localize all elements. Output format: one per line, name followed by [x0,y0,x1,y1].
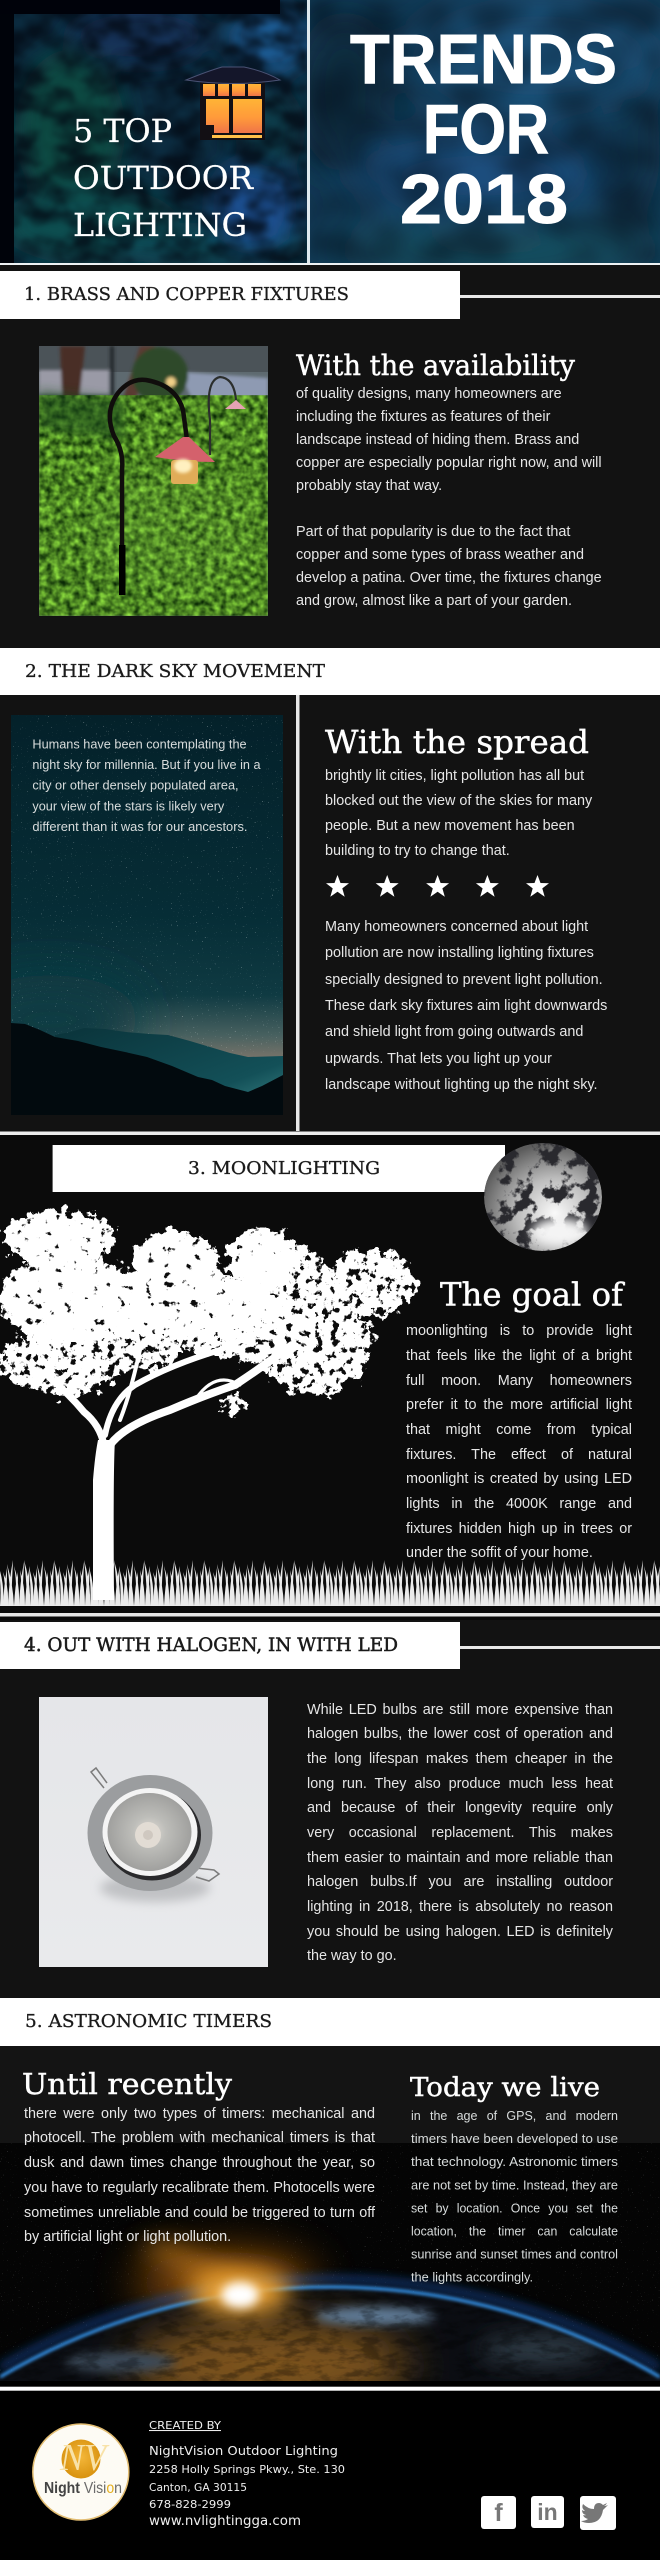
text: moonlighting paragraph: fixtures hidden high up in trees or [406,1521,632,1537]
hero title: 5 top outdoor lighting: LIGHTING [73,206,247,244]
text: LED paragraph: While LED bulbs are still more expensive than [307,1702,613,1718]
text: LED paragraph: and because of their longevity require only [307,1800,613,1816]
text: dark sky fixtures paragraph: pollution are now installing lighting fixtures [325,945,594,961]
text: dark sky fixtures paragraph: and shield light from going outwards and [325,1024,583,1040]
footer [0,2381,660,2560]
hero title: 5 top outdoor lighting [73,112,254,244]
text: LED paragraph: very occasional replacement. This makes [307,1825,613,1841]
section heading bar 5 [0,1998,660,2046]
text: moonlighting paragraph: moonlight is created by using LED [406,1471,632,1487]
text: humans have been contemplating [32,736,261,834]
text: GPS timers column: set by location. Once you set the [411,2200,618,2215]
text: dark sky fixtures paragraph [325,919,607,1093]
text: created by: 2258 Holly Springs Pkwy., Ste. 130 [149,2464,345,2476]
heading: today we live: Today we live [410,2073,600,2103]
section heading bar 4: 4. OUT WITH HALOGEN, IN WITH LED [24,1634,398,1656]
text: LED paragraph [307,1702,613,1964]
text: patina paragraph [296,524,602,609]
text: LED paragraph: the long lifespan makes them cheaper in the [307,1751,613,1767]
section heading bar 1 [0,271,460,319]
text: LED paragraph: them easier to maintain and more reliable than [307,1850,613,1866]
text: GPS timers column: sunrise and sunset times and control [411,2246,618,2261]
text: created by: 678-828-2999 [149,2499,231,2511]
text: dark sky fixtures paragraph: landscape without lighting up the night sky. [325,1077,598,1093]
logo: NightVision: NV [59,2437,110,2479]
text: GPS timers column: in the age of GPS, and modern [411,2108,618,2123]
text: light pollution intro: brightly lit cities, light pollution has all but [325,768,584,784]
text: availability paragraph [296,386,602,494]
icon: facebook: f [494,2499,503,2527]
hero title: 5 top outdoor lighting: OUTDOOR [73,159,254,197]
text: moonlighting paragraph: lights in the 4000K range and [406,1496,632,1512]
text: dark sky fixtures paragraph: Many homeowners concerned about light [325,919,588,935]
text: LED paragraph: you should be using halogen. LED is definitely [307,1924,613,1940]
section 3: moonlighting [0,1135,660,1620]
text: LED paragraph: halogen bulbs.If you are installing outdoor [307,1874,613,1890]
text: availability paragraph: including the fixtures as features of their [296,409,550,425]
text: humans have been contemplating: night sky for millennia. But if you live in a [32,757,261,772]
text: LED paragraph: the way to go. [307,1948,397,1964]
icon: twitter bird [580,2496,616,2530]
hero title: trends for 2018: FOR [423,90,549,168]
icon: five stars [326,875,549,897]
photo: sunrise over earth [0,2143,660,2381]
hero divider [307,0,310,263]
text: dark sky fixtures paragraph: specially designed to prevent light pollution. [325,972,603,988]
text: moonlighting paragraph: under the soffit of your home. [406,1545,593,1561]
logo: NightVision [33,2424,129,2520]
heading: until recently: Until recently [22,2067,233,2101]
text: light pollution intro: people. But a new movement has been [325,818,575,834]
text: LED paragraph: lighting in 2018, there is absolutely no reason [307,1899,613,1915]
text: LED paragraph: halogen bulbs, the lower cost of operation and [307,1726,613,1742]
section heading bar 3 [53,1145,505,1192]
hero banner [0,0,660,265]
text: availability paragraph: copper are especially popular right now, and will [296,455,602,471]
text: timers paragraph: by artificial light or light pollution. [24,2229,231,2245]
text: light pollution intro: blocked out the view of the skies for many [325,793,592,809]
text: humans have been contemplating: city or other densely populated area, [32,778,239,793]
text: patina paragraph: Part of that popularity is due to the fact that [296,524,570,540]
icon: facebook [481,2496,516,2529]
text: patina paragraph: and grow, almost like a part of your garden. [296,593,572,609]
text: light pollution intro: building to try to change that. [325,842,510,858]
grass strip [0,1558,660,1606]
heading: with the spread: With the spread [325,723,589,761]
photo: recessed LED downlight [39,1697,268,1967]
text: patina paragraph: develop a patina. Over time, the fixtures change [296,570,602,586]
text: dark sky fixtures paragraph: upwards. That lets you light up your [325,1051,552,1067]
text: LED paragraph: long run. They also produce much less heat [307,1776,613,1792]
section heading bar 5: 5. ASTRONOMIC TIMERS [25,2011,272,2032]
heading: the goal of: The goal of [440,1276,625,1314]
text: humans have been contemplating: Humans have been contemplating the [32,736,247,751]
text: moonlighting paragraph: moonlighting is to provide light [406,1323,632,1339]
text: timers paragraph: photocell. The problem with mechanical timers is that [24,2130,375,2146]
text: moonlighting paragraph: that might come from typical [406,1422,632,1438]
text: moonlighting paragraph: that feels like the light of a bright [406,1348,632,1364]
text: moonlighting paragraph: prefer it to the more artificial light [406,1397,632,1413]
text: created by: www.nvlightingga.com [149,2514,301,2529]
text: dark sky fixtures paragraph: These dark sky fixtures aim light downwards [325,998,607,1014]
text: timers paragraph: you have to regularly recalibrate them. Photocells were [24,2180,375,2196]
text: light pollution intro [325,768,592,858]
text: moonlighting paragraph: full moon. Many homeowners [406,1373,632,1389]
section heading bar 4 [0,1622,460,1669]
text: patina paragraph: copper and some types of brass weather and [296,547,584,563]
text: timers paragraph: dusk and dawn times change throughout the year, so [24,2155,375,2171]
text: moonlighting paragraph: fixtures. The effect of natural [406,1447,632,1463]
section 5: astronomic timers [0,1998,660,2381]
text: humans have been contemplating: your view of the stars is likely very [32,798,225,813]
text: moonlighting paragraph [406,1323,632,1561]
text: timers paragraph [24,2106,376,2245]
icon: full moon [484,1143,602,1251]
text: created by: NightVision Outdoor Lighting [149,2443,338,2458]
text: created by: CREATED BY [149,2420,222,2432]
section heading bar 2 [0,648,660,695]
hero title: trends for 2018 [350,20,617,238]
section heading bar 2: 2. THE DARK SKY MOVEMENT [25,661,325,682]
hero title: trends for 2018: 2018 [400,160,568,238]
photo: copper path light on lawn [39,346,268,616]
hero title: 5 top outdoor lighting: 5 TOP [73,112,172,150]
text: availability paragraph: of quality designs, many homeowners are [296,386,562,402]
section 1: brass and copper fixtures [0,265,660,648]
icon: linkedin [531,2496,564,2528]
section 4: out with halogen, in with LED [0,1620,660,1998]
heading: with the availability: With the availability [296,349,575,382]
text: GPS timers column: timers have been developed to use [411,2131,618,2146]
text: humans have been contemplating: different than it was for our ancestors. [32,819,248,834]
icon: linkedin: in [537,2499,558,2525]
text: availability paragraph: probably stay that way. [296,478,442,494]
text: GPS timers column: that technology. Astronomic timers [411,2154,619,2169]
section heading bar 1: 1. BRASS AND COPPER FIXTURES [24,284,349,305]
text: GPS timers column: the lights accordingly. [411,2270,533,2285]
hero photo: garden at night [0,0,660,267]
text: availability paragraph: landscape instead of hiding them. Brass and [296,432,579,448]
text: timers paragraph: sometimes unreliable and could be triggered to turn off [24,2205,375,2221]
logo: NightVision: Night Vision [44,2480,122,2497]
text: GPS timers column: location, the timer can calculate [411,2223,618,2238]
text: created by [149,2420,345,2529]
section 2: the dark sky movement [0,648,660,1135]
icon: glowing lantern [186,67,280,140]
text: created by: Canton, GA 30115 [149,2482,247,2494]
tree silhouette [0,1210,414,1600]
hero title: trends for 2018: TRENDS [350,20,617,98]
text: GPS timers column: are not set by time. Instead, they are [411,2177,618,2192]
photo: night sky over mountains [0,715,283,1115]
text: GPS timers column [411,2108,619,2285]
section heading bar 3: 3. MOONLIGHTING [188,1158,380,1179]
text: timers paragraph: there were only two types of timers: mechanical and [24,2106,375,2122]
